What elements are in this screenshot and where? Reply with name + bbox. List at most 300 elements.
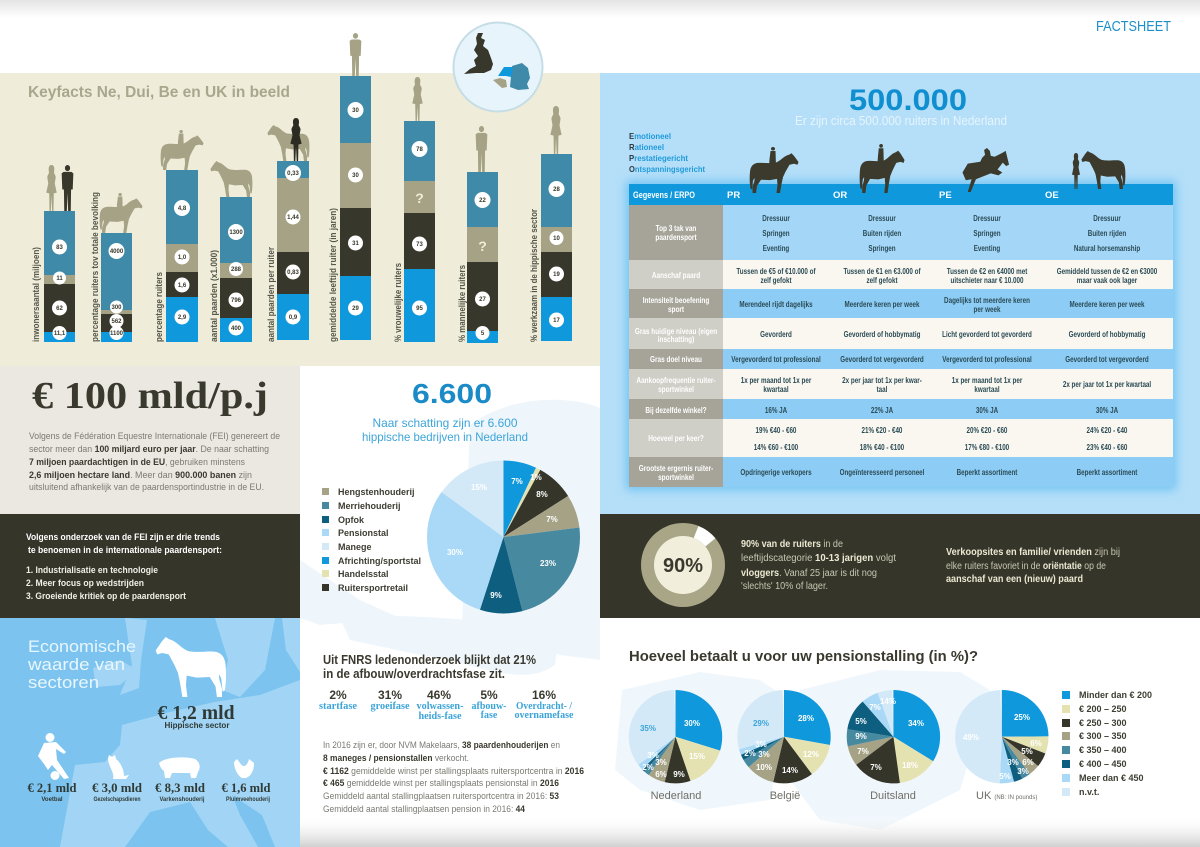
table row labels: sport	[668, 304, 684, 314]
text block: NVM makelaars: € 1162 gemiddelde winst per stallingsplaats ruitersportcentra in 2016	[323, 766, 584, 777]
stat: volwassenheidsfase: heids-fase	[418, 711, 462, 722]
table column PE: Vergevorderd tot professional	[942, 354, 1032, 364]
bar chart: aantal paarden: 796	[231, 298, 242, 304]
pie chart: Nederland: 15%	[689, 752, 705, 761]
table column PE: Tussen de €2 en €4000 met	[947, 266, 1028, 276]
pie chart: bedrijven: 30%	[447, 548, 463, 557]
table column PR: kwartaal	[763, 384, 789, 394]
bar chart: werkzaam in de hippische sector: 19	[553, 272, 560, 278]
table row labels: Grootste ergernis ruiter-	[639, 463, 714, 473]
table column OR: Springen	[868, 243, 896, 253]
bar chart: gemiddelde leeftijd ruiter: 30	[352, 173, 359, 179]
legend: pensionstalling: € 400 – 450	[1079, 759, 1127, 769]
pie chart: Nederland: 35%	[640, 724, 656, 733]
legend: bedrijven: Hengstenhouderij	[338, 487, 415, 497]
legend: pensionstalling: Meer dan € 450	[1079, 773, 1144, 783]
pie chart: Duitsland: 18%	[902, 761, 918, 770]
stat: groeifase	[370, 688, 410, 712]
subtitle: bedrijven: hippische bedrijven in Nederland	[362, 430, 528, 444]
table column PR: Tussen de €5 of €10.000 of	[736, 266, 816, 276]
bar chart: percentage ruiters tov totale bevolking: percentage ruiters tov totale bevolking	[90, 192, 101, 342]
table row labels: Top 3 tak van	[656, 223, 697, 233]
panel: ruiters background	[600, 73, 1200, 514]
table column OR: Meerdere keren per week	[844, 299, 920, 309]
table row labels: Gras doel niveau	[650, 354, 702, 364]
table row labels	[635, 223, 718, 482]
pie chart: UK: 6%	[1022, 758, 1034, 767]
text block: FEI sector	[29, 431, 280, 493]
icon: pig	[159, 757, 200, 778]
list: trends: 3. Groeiende kritiek op de paardensport	[26, 591, 186, 601]
legend: bedrijven	[322, 487, 421, 593]
table column PR: Springen	[762, 228, 790, 238]
table column PE: per week	[974, 304, 1001, 314]
bar chart: aantal paarden: 288	[231, 267, 242, 273]
table column PR: Eventing	[763, 243, 790, 253]
table column PE	[942, 213, 1032, 477]
stat: afbouwfase: fase	[481, 710, 498, 721]
stat: startfase: 2%	[329, 688, 347, 702]
heading: FNRS onderzoek	[323, 652, 536, 681]
table glow	[626, 181, 1176, 490]
pie chart: Nederland: Nederland	[651, 790, 701, 802]
stat: overdrachtsfase: 16%	[532, 688, 556, 702]
table column PR: Opdringerige verkopers	[740, 467, 812, 477]
table row labels: paardensport	[655, 232, 697, 242]
pie chart: Nederland: 30%	[684, 719, 700, 728]
bar chart: mannelijke ruiters	[457, 126, 498, 343]
text block: trends intro	[26, 532, 222, 555]
heading: 500.000: 500.000	[849, 84, 967, 117]
table column OE: maar vaak ook lager	[1077, 275, 1137, 285]
pie chart: Nederland: 6%	[655, 770, 667, 779]
table column OR: taal	[877, 384, 887, 394]
pie chart: België	[744, 713, 819, 802]
legend: bedrijven: Pensionstal	[338, 528, 389, 538]
bar chart: werkzaam in de hippische sector: 17	[553, 318, 560, 324]
icon: cat	[108, 755, 129, 779]
pie chart: UK	[963, 713, 1042, 802]
bar chart: percentage ruiters: percentage ruiters	[154, 272, 165, 342]
legend: pensionstalling: € 300 – 350	[1079, 731, 1127, 741]
bar chart: aantal paarden per ruiter	[266, 118, 309, 342]
value: varkenshouderij	[155, 781, 205, 803]
table column OR: Ongeïnteresseerd personeel	[840, 467, 924, 477]
table column PE: Dagelijks tot meerdere keren	[944, 295, 1030, 305]
stat: overdrachtsfase	[514, 688, 574, 721]
value: voetbal: Voetbal	[41, 797, 63, 803]
heading: economische waarde: Economische	[28, 637, 136, 656]
bar chart: vrouwelijke ruiters: 73	[416, 242, 423, 248]
value: varkenshouderij: € 8,3 mld	[155, 781, 205, 795]
bar chart: werkzaam in de hippische sector: % werkzaam in de hippische sector	[529, 209, 540, 342]
heading: 100 mld per jaar: € 100 mld/p.j	[32, 375, 268, 417]
subtitle: ruiters: Er zijn circa 500.000 ruiters in Nederland	[795, 113, 1007, 128]
bar chart: gemiddelde leeftijd ruiter: gemiddelde leeftijd ruiter (in jaren)	[328, 208, 339, 342]
bar chart: inwonersaantal: 11	[56, 276, 63, 282]
pie chart: Nederland: 3%	[647, 751, 659, 760]
stat: startfase: startfase	[319, 701, 358, 712]
table column PE: kwartaal	[974, 384, 1000, 394]
table column OR: Gevorderd of hobbymatig	[844, 329, 921, 339]
legend: bedrijven: Africhting/sportstal	[338, 556, 421, 566]
stat: overdrachtsfase: Overdracht- /	[516, 701, 572, 712]
legend: ERPO	[629, 131, 705, 174]
text block: NVM makelaars: € 465 gemiddelde winst per stallingsplaats pensionstal in 2016	[323, 778, 559, 789]
panel: trends	[0, 514, 300, 618]
text block: vloggers: leeftijdscategorie 10-13 jarigen volgt	[741, 553, 896, 564]
heading: economische waarde: waarde van	[27, 655, 125, 674]
list: trends: 2. Meer focus op wedstrijden	[26, 578, 144, 588]
pie chart: UK: UK (NB: IN pounds)	[976, 790, 1037, 802]
text block: verkoopsites: elke ruiters favoriet in de oriëntatie op de	[946, 561, 1106, 572]
table column PE: Springen	[973, 228, 1001, 238]
table header labels: OR	[833, 190, 847, 201]
legend: bedrijven: Manege	[338, 542, 372, 552]
icon: footballer	[38, 733, 69, 780]
bar chart: percentage ruiters: 2,9	[178, 315, 187, 321]
pie chart: België: 10%	[756, 763, 772, 772]
table column PR	[731, 213, 821, 477]
text block: NVM makelaars: In 2016 zijn er, door NVM Makelaars, 38 paardenhouderijen en	[323, 740, 560, 751]
stat: overdrachtsfase: overnamefase	[514, 710, 574, 721]
bar chart: inwonersaantal: 11,1	[54, 331, 66, 337]
table column OR: Dressuur	[868, 213, 896, 223]
bar chart: aantal paarden: 1300	[229, 230, 243, 236]
text block: vloggers	[741, 539, 896, 592]
stat: afbouwfase	[472, 688, 506, 721]
pie chart: België: 14%	[782, 766, 798, 775]
text block: vloggers: vloggers. Vanaf 25 jaar is dit nog	[741, 568, 877, 579]
pie chart: Duitsland: 7%	[869, 703, 881, 712]
bar chart: percentage ruiters tov totale bevolking: 1100	[110, 331, 124, 337]
icon: map of countries	[454, 22, 542, 112]
value: voetbal: € 2,1 mld	[28, 781, 77, 795]
table row labels: Aanschaf paard	[652, 270, 701, 280]
value: pluimveehouderij: € 1,6 mld	[222, 781, 271, 795]
table column PE: Licht gevorderd tot gevorderd	[942, 329, 1032, 339]
table column OE: Natural horsemanship	[1074, 243, 1141, 253]
legend: ERPO: Rationeel	[629, 142, 664, 152]
bar chart: aantal paarden: aantal paarden (x1.000)	[209, 250, 220, 342]
stat: groeifase: groeifase	[370, 701, 410, 712]
label: factsheet: FACTSHEET	[1096, 18, 1171, 35]
bar chart: aantal paarden per ruiter: 0,9	[289, 315, 298, 321]
legend: pensionstalling: € 200 – 250	[1079, 704, 1127, 714]
table row labels: Gras huidige niveau (eigen	[635, 326, 718, 336]
table column PE: 20% €20 - €60	[967, 425, 1007, 435]
pie chart: UK: 49%	[963, 733, 979, 742]
legend: pensionstalling: € 250 – 300	[1079, 718, 1127, 728]
table column OR: 18% €40 - €100	[860, 442, 904, 452]
subtitle: bedrijven	[362, 416, 528, 444]
value: gezelschapsdieren	[92, 781, 142, 803]
icon: chicken	[234, 759, 254, 778]
value: gezelschapsdieren: € 3,0 mld	[92, 781, 142, 795]
table column PR: 1x per maand tot 1x per	[741, 375, 811, 385]
value: voetbal	[28, 781, 77, 803]
bar chart: aantal paarden	[209, 161, 252, 342]
bar chart: aantal paarden per ruiter: 0,33	[287, 171, 299, 177]
table column OE: Dressuur	[1093, 213, 1121, 223]
pie chart: UK: 5%	[1021, 747, 1033, 756]
stat: afbouwfase: 5%	[480, 688, 498, 702]
table row labels: sportwinkel	[658, 472, 694, 482]
table column PR: 14% €60 - €100	[754, 442, 798, 452]
bottom page fade	[300, 815, 1200, 847]
panel: vloggers	[600, 514, 1200, 618]
chart: donut 90%	[641, 523, 725, 607]
pie chart: bedrijven	[447, 473, 558, 600]
value: hippische sector: Hippische sector	[164, 720, 230, 730]
icon: jumping horse PE	[962, 148, 1009, 192]
text block: NVM makelaars: Gemiddeld aantal stallingplaatsen ruitersportcentra in 2016: 53	[323, 791, 559, 802]
bar chart: aantal paarden per ruiter: 1,44	[287, 215, 299, 221]
text block: verkoopsites	[946, 547, 1120, 585]
table column PE: uitschieter naar € 10.000	[950, 275, 1024, 285]
text block: trends intro: Volgens onderzoek van de FEI zijn er drie trends	[26, 532, 220, 542]
panel: keyfacts background	[0, 73, 600, 366]
value: pluimveehouderij	[222, 781, 271, 803]
bar chart: gemiddelde leeftijd ruiter: 29	[352, 306, 359, 312]
bar chart: gemiddelde leeftijd ruiter: 30	[352, 108, 359, 114]
pie chart: Nederland	[640, 713, 705, 802]
icon: horse with rider PR	[750, 147, 798, 193]
heading: pensionstalling: Hoeveel betaalt u voor uw pensionstalling (in %)?	[629, 648, 978, 665]
table row labels: inschatting)	[658, 334, 695, 344]
table column PE: 1x per maand tot 1x per	[952, 375, 1022, 385]
table column OR: 2x per jaar tot 1x per kwar-	[842, 375, 922, 385]
table column OR: 21% €20 - €40	[862, 425, 902, 435]
pie chart: België: 3%	[755, 740, 767, 749]
table column PE: Dressuur	[973, 213, 1001, 223]
pie chart: België: 3%	[758, 750, 770, 759]
pie chart: België: 2%	[744, 749, 756, 758]
bar chart: werkzaam in de hippische sector: 10	[553, 236, 560, 242]
table header labels	[633, 190, 1059, 201]
table column OE: Meerdere keren per week	[1069, 299, 1145, 309]
table row labels: Bij dezelfde winkel?	[645, 405, 707, 415]
table column OR	[840, 213, 924, 477]
table row labels: sportwinkel	[658, 384, 694, 394]
heading: economische waarde	[27, 637, 136, 692]
bar chart: percentage ruiters tov totale bevolking	[90, 192, 143, 342]
icon: person with horse OE	[1072, 151, 1125, 189]
bar chart: aantal paarden: 400	[231, 326, 242, 332]
table row labels: Hoeveel per keer?	[648, 433, 704, 443]
pie chart: Nederland: 9%	[673, 770, 685, 779]
text block: FEI sector: Volgens de Fédération Equestre Internationale (FEI) genereert de	[29, 431, 280, 442]
text block: NVM makelaars	[323, 740, 584, 815]
table column OE: 23% €40 - €60	[1087, 442, 1127, 452]
value: varkenshouderij: Varkenshouderij	[160, 797, 205, 803]
legend: ERPO: Prestatiegericht	[629, 153, 688, 163]
text block: FEI sector: 2,6 miljoen hectare land. Meer dan 900.000 banen zijn	[29, 470, 252, 481]
table column OE: 24% €20 - €40	[1087, 425, 1127, 435]
pie chart: bedrijven: 8%	[536, 490, 548, 499]
table row labels: Aankoopfrequentie ruiter-	[636, 375, 716, 385]
pie chart: Duitsland	[855, 697, 924, 802]
bar chart: inwonersaantal: 62	[56, 306, 63, 312]
panel: economische waarde	[0, 618, 300, 847]
table column PR: 16% JA	[765, 405, 788, 415]
heading: 6.600: 6.600	[412, 378, 492, 409]
table column OE: 30% JA	[1096, 405, 1119, 415]
bar chart: inwonersaantal	[31, 165, 75, 342]
panel: bedrijven background map	[300, 400, 600, 675]
pie chart: UK: 5%	[999, 772, 1011, 781]
table: ERPO gegevens	[629, 184, 1173, 487]
text block: verkoopsites: Verkoopsites en familie/ vrienden zijn bij	[946, 547, 1120, 558]
bar chart: percentage ruiters tov totale bevolking: 4000	[110, 249, 124, 255]
pie chart: Duitsland: 9%	[855, 732, 867, 741]
bar chart: werkzaam in de hippische sector: 28	[553, 187, 560, 193]
pie chart: België: 12%	[803, 750, 819, 759]
text block: vloggers: 'slechts' 10% of lager.	[741, 581, 828, 592]
table column PR: Merendeel rijdt dagelijks	[739, 299, 813, 309]
table column OE: 2x per jaar tot 1x per kwartaal	[1063, 379, 1151, 389]
table column PR: 19% €40 - €60	[756, 425, 796, 435]
bar chart: vrouwelijke ruiters: % vrouwelijke ruiters	[393, 263, 404, 342]
legend: pensionstalling: € 350 – 400	[1079, 745, 1127, 755]
legend: pensionstalling: Minder dan € 200	[1079, 690, 1152, 700]
table row labels: Intensiteit beoefening	[643, 295, 710, 305]
bar chart: mannelijke ruiters: % mannelijke ruiters	[457, 265, 468, 342]
bar chart: mannelijke ruiters: 22	[479, 198, 486, 204]
pie chart: Duitsland: 14%	[880, 697, 896, 706]
text block: verkoopsites: aanschaf van een (nieuw) paard	[946, 574, 1083, 585]
table column PR: Vergevorderd tot professional	[731, 354, 821, 364]
table header labels: PE	[939, 190, 952, 201]
stat: volwassenheidsfase	[416, 688, 464, 722]
bar chart: vrouwelijke ruiters: 95	[416, 306, 423, 312]
table column OR: Gevorderd tot vergevorderd	[840, 354, 924, 364]
pie chart: België: 29%	[753, 719, 769, 728]
table column OE: Gemiddeld tussen de €2 en €3000	[1057, 266, 1157, 276]
heading: FNRS onderzoek: in de afbouw/overdrachtsfase zit.	[323, 666, 505, 681]
bar chart: percentage ruiters: 1,0	[178, 255, 187, 261]
pie chart: bedrijven: 9%	[490, 591, 502, 600]
background map: pensionstalling	[615, 670, 990, 830]
table column PE: Eventing	[974, 243, 1001, 253]
bar chart: mannelijke ruiters: ?	[478, 238, 487, 254]
pie chart: Duitsland: 7%	[857, 747, 869, 756]
stat: afbouwfase: afbouw-	[472, 701, 506, 712]
bar chart: gemiddelde leeftijd ruiter: 31	[352, 241, 359, 247]
text block: FEI sector: uitsluitend afhankelijk van de paardensportindustrie in de EU.	[29, 482, 264, 493]
table column OE: Gevorderd of hobbymatig	[1069, 329, 1146, 339]
bar chart: percentage ruiters tov totale bevolking: 300	[111, 305, 122, 311]
pie chart: Duitsland: 7%	[870, 763, 882, 772]
icon: horse with rider OR	[860, 144, 905, 193]
bar chart: percentage ruiters	[154, 130, 204, 342]
table column OR: Tussen de €1 en €3.000 of	[843, 266, 921, 276]
bar chart: mannelijke ruiters: 27	[479, 297, 486, 303]
bar chart: vrouwelijke ruiters: ?	[415, 190, 424, 206]
table column OR: 22% JA	[871, 405, 894, 415]
table header labels: OE	[1045, 190, 1059, 201]
text block: vloggers: 90% van de ruiters in de	[741, 539, 843, 550]
table column PE: 17% €80 - €100	[965, 442, 1009, 452]
pie chart: Duitsland: 5%	[855, 717, 867, 726]
table column PR: Gevorderd	[760, 329, 792, 339]
list: trends: 1. Industrialisatie en technologie	[26, 565, 158, 575]
heading: economische waarde: sectoren	[28, 673, 99, 692]
table header labels: Gegevens / ERPO	[633, 190, 695, 201]
legend: ERPO: Emotioneel	[629, 131, 671, 141]
pie chart: bedrijven: 15%	[471, 483, 487, 492]
bar chart: aantal paarden per ruiter: 0,83	[287, 270, 299, 276]
table header labels: PR	[727, 190, 740, 201]
legend: bedrijven: Handelsstal	[338, 569, 389, 579]
stat: startfase	[319, 688, 358, 712]
bar chart: percentage ruiters: 4,8	[178, 206, 187, 212]
bar chart: vrouwelijke ruiters	[393, 77, 435, 342]
heading: FNRS onderzoek: Uit FNRS ledenonderzoek blijkt dat 21%	[323, 652, 536, 667]
bar chart: aantal paarden per ruiter: aantal paarden per ruiter	[266, 247, 277, 342]
legend: pensionstalling	[1062, 690, 1152, 797]
chart: donut 90%: 90%	[663, 555, 703, 577]
table column OE: Gevorderd tot vergevorderd	[1065, 354, 1149, 364]
table column OR: zelf gefokt	[866, 275, 898, 285]
bar chart: werkzaam in de hippische sector	[529, 106, 572, 342]
legend: ERPO: Ontspanningsgericht	[629, 164, 705, 174]
text block: NVM makelaars: Gemiddeld aantal stallingplaatsen pension in 2016: 44	[323, 804, 526, 815]
stat: volwassenheidsfase: 46%	[427, 688, 451, 702]
bar chart: percentage ruiters tov totale bevolking: 562	[111, 319, 122, 325]
text block: NVM makelaars: 8 maneges / pensionstallen verkocht.	[323, 753, 469, 764]
pie chart: UK: 3%	[1017, 767, 1029, 776]
pie chart: bedrijven: 7%	[546, 515, 558, 524]
pie chart: Nederland: 3%	[655, 758, 667, 767]
value: hippische sector: € 1,2 mld	[158, 702, 234, 724]
text block: trends intro: te benoemen in de internationale paardensport:	[28, 545, 222, 555]
bar chart: mannelijke ruiters: 5	[481, 331, 485, 337]
top header strip	[0, 0, 1200, 18]
pie chart: bedrijven: 7%	[511, 477, 523, 486]
text block: FEI sector: sector meer dan 100 miljard euro per jaar. De naar schatting	[29, 444, 269, 455]
bar chart: inwonersaantal: 83	[56, 245, 63, 251]
list: trends	[26, 565, 186, 601]
pie chart: Duitsland: Duitsland	[870, 790, 916, 802]
legend: pensionstalling: n.v.t.	[1079, 787, 1099, 797]
text block: FEI sector: 7 miljoen paardachtigen in de EU, gebruiken minstens	[29, 457, 245, 468]
subtitle: bedrijven: Naar schatting zijn er 6.600	[372, 416, 518, 430]
pie chart: Duitsland: 34%	[908, 719, 924, 728]
pie chart: UK: 3%	[1007, 758, 1019, 767]
heading: keyfacts: Keyfacts Ne, Dui, Be en UK in beeld	[28, 84, 290, 101]
table column OE	[1057, 213, 1157, 477]
legend: bedrijven: Ruitersportretail	[338, 583, 408, 593]
table column OE: Buiten rijden	[1088, 228, 1127, 238]
pie chart: bedrijven: 23%	[540, 559, 556, 568]
table column PR: zelf gefokt	[760, 275, 792, 285]
value: gezelschapsdieren: Gezelschapsdieren	[94, 797, 141, 803]
legend: bedrijven: Opfok	[338, 515, 365, 525]
legend: bedrijven: Merriehouderij	[338, 501, 401, 511]
table column PE: Beperkt assortiment	[957, 467, 1018, 477]
bar chart: gemiddelde leeftijd ruiter	[328, 33, 371, 342]
pie chart: Nederland: 2%	[642, 763, 654, 772]
pie chart: bedrijven: 1%	[530, 473, 542, 482]
bar chart: inwonersaantal: inwonersaantal (miljoen)	[31, 247, 42, 342]
bar chart: percentage ruiters: 1,6	[178, 283, 187, 289]
value: pluimveehouderij: Pluimveehouderij	[226, 797, 270, 803]
pie chart: België: België	[770, 790, 800, 802]
bar chart: vrouwelijke ruiters: 78	[416, 147, 423, 153]
pie chart: België: 28%	[798, 714, 814, 723]
pie chart: UK: 25%	[1014, 713, 1030, 722]
